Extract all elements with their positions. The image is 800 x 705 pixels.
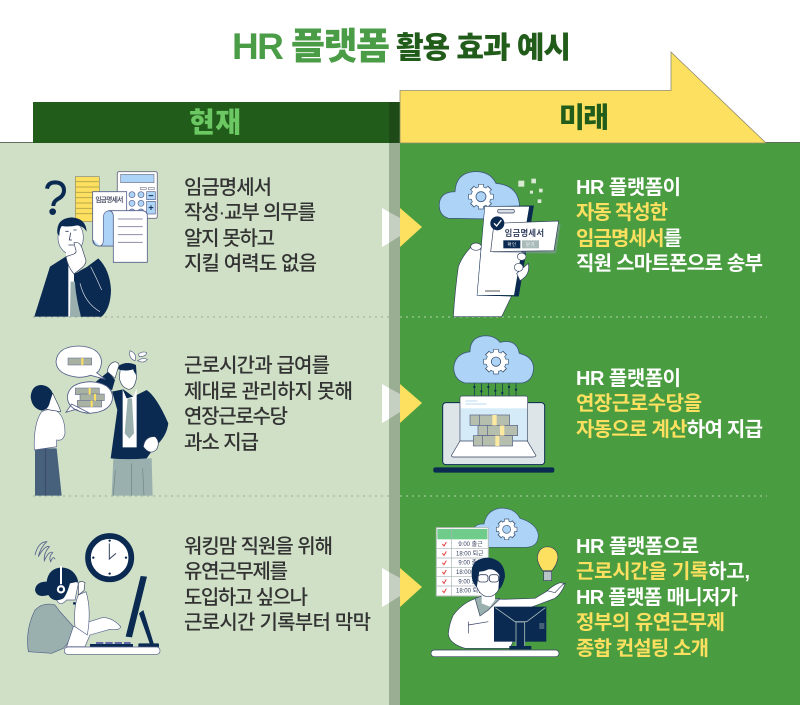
icon: worried man with payslip and calculator	[34, 172, 157, 317]
arrow: row 1	[382, 208, 422, 247]
heading: present tab: 현재	[189, 107, 241, 138]
icon: laptop with cloud and money	[433, 336, 554, 473]
payslip card: 확인	[507, 241, 516, 248]
text block: row 1 future: 직원 스마트폰으로 송부	[576, 252, 763, 275]
desk	[431, 650, 559, 657]
icon: two men with money speech bubbles	[31, 346, 168, 496]
icon: phone with payslip and cloud	[439, 172, 561, 317]
heading: future arrow	[400, 52, 766, 143]
hand	[453, 243, 512, 317]
gear	[483, 349, 509, 374]
heading: present tab	[33, 102, 400, 143]
short man	[31, 385, 65, 496]
cloud	[454, 336, 534, 383]
text block: row 2 present: 근로시간과 급여를	[184, 354, 330, 377]
text block: row 1 future: 임금명세서를	[576, 227, 682, 250]
payslip card: 닫기	[526, 241, 535, 248]
timesheet: 18:00 퇴근	[456, 568, 484, 576]
text block: row 3 present: 근로시간 기록부터 막막	[184, 611, 371, 634]
text block: row 1 present: 작성·교부 의무를	[184, 201, 316, 224]
panel: present background	[0, 143, 400, 705]
payslip card: 임금명세서	[505, 228, 544, 238]
timesheet: 9:00 출근	[458, 577, 483, 585]
text block: row 2 present: 과소 지급	[184, 431, 259, 454]
text block: row 1 future: HR 플랫폼이	[576, 176, 681, 199]
text block: row 2 present: 제대로 관리하지 못해	[184, 380, 353, 403]
text block: row 2 future: HR 플랫폼이	[576, 367, 681, 390]
stress scribble	[35, 542, 55, 562]
timesheet: 18:00 퇴근	[456, 587, 484, 595]
calculator	[117, 172, 157, 218]
phone	[477, 206, 533, 296]
timesheet: 9:00 출근	[458, 559, 483, 567]
heading: future arrow: 미래	[559, 102, 609, 133]
text block: row 1 future: 자동 작성한	[576, 201, 668, 224]
text block: row 3 present	[184, 535, 371, 634]
text block: row 3 future	[576, 535, 750, 660]
fingers	[471, 243, 529, 281]
text block: row 2 present: 연장근로수당	[184, 405, 288, 428]
text block: row 1 present: 지킬 여력도 없음	[184, 252, 317, 275]
text block: row 1 present	[184, 176, 317, 275]
text block: row 3 future: 종합 컨설팅 소개	[576, 637, 709, 660]
man	[448, 583, 565, 648]
connector lines	[474, 382, 516, 397]
icon: stressed working mom at computer	[27, 536, 160, 654]
lightbulb	[537, 547, 558, 581]
text block: row 3 future: 근로시간을 기록하고,	[576, 560, 750, 583]
timesheet: 18:00 퇴근	[456, 549, 484, 557]
text block: row 2 future: 연장근로수당을	[576, 392, 702, 415]
text block: row 2 future: 자동으로 계산하여 지급	[576, 418, 763, 441]
text block: row 3 future: HR 플랫폼으로	[576, 535, 699, 558]
timesheet	[436, 528, 488, 596]
payslip sheet	[93, 192, 147, 262]
icon: consultant with timesheet, cloud and lightbulb	[431, 508, 565, 657]
money	[470, 415, 518, 446]
text block: row 1 present: 임금명세서	[184, 176, 272, 199]
top speech bubble	[56, 346, 105, 379]
gear	[496, 519, 517, 540]
text block: row 1 future	[576, 176, 763, 275]
yellow ledger	[75, 177, 99, 222]
monitor	[126, 576, 159, 647]
text block: row 2 future	[576, 367, 763, 441]
head	[58, 221, 83, 254]
payslip card	[490, 216, 561, 254]
jacket	[34, 256, 111, 317]
cloud	[439, 172, 519, 219]
arm	[75, 266, 104, 317]
title: 활용 효과 예시	[396, 32, 571, 65]
title	[232, 26, 571, 67]
text block: row 3 present: 유연근무제를	[184, 560, 288, 583]
hand	[66, 242, 86, 274]
cloud	[471, 508, 538, 547]
arrow: row 3	[382, 568, 422, 607]
monitor	[494, 607, 546, 649]
arrow: row 2	[382, 384, 422, 423]
tall man	[96, 351, 168, 496]
sparkles	[518, 179, 543, 203]
gear	[468, 184, 494, 209]
text block: row 3 future: 정부의 유연근무제	[576, 611, 725, 634]
timesheet: 9:00 출근	[458, 540, 483, 548]
panel: future background	[400, 143, 800, 705]
clock	[88, 536, 131, 579]
row dividers	[33, 317, 767, 496]
text block: row 3 present: 도입하고 싶으나	[184, 586, 308, 609]
title: HR 플랫폼	[232, 26, 390, 67]
text block: row 3 future: HR 플랫폼 매니저가	[576, 586, 738, 609]
lower speech bubble	[66, 382, 113, 413]
payslip sheet: 임금명세서	[95, 195, 123, 204]
text block: row 2 present	[184, 354, 353, 454]
desk and keyboard	[64, 642, 160, 654]
question mark	[47, 182, 64, 206]
woman	[27, 604, 73, 653]
text block: row 3 present: 워킹맘 직원을 위해	[184, 535, 333, 558]
laptop	[443, 403, 545, 465]
text block: row 1 present: 알지 못하고	[184, 227, 275, 250]
